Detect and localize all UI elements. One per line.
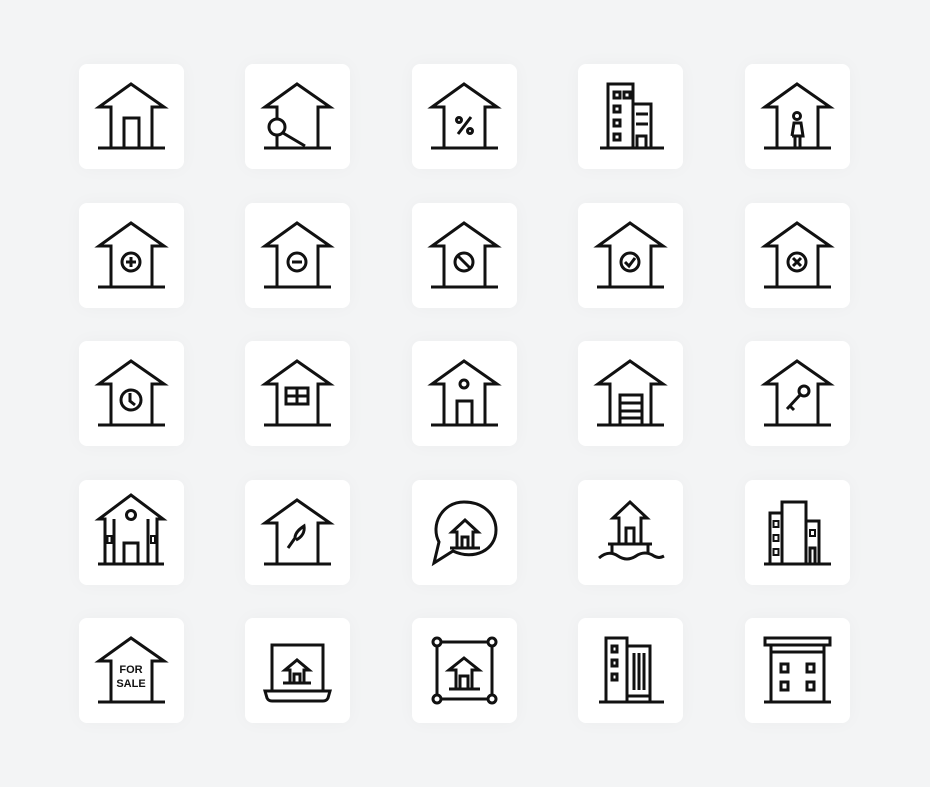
tile: for sale xyxy=(79,618,184,723)
tile: home brush xyxy=(245,480,350,585)
tile: for sale: FOR xyxy=(119,664,143,676)
tile: apartment blocks xyxy=(745,480,850,585)
tile: floor plan xyxy=(412,618,517,723)
tile: home person xyxy=(745,64,850,169)
tile: cottage xyxy=(412,341,517,446)
tile: home percent xyxy=(412,64,517,169)
tile: home search xyxy=(245,64,350,169)
tile: home cancel xyxy=(745,203,850,308)
tile: mansion xyxy=(79,480,184,585)
tile: flat building xyxy=(745,618,850,723)
tile: home check xyxy=(578,203,683,308)
tile: speech bubble home xyxy=(412,480,517,585)
tile: home window xyxy=(245,341,350,446)
tile: tall building xyxy=(578,618,683,723)
tile: home add xyxy=(79,203,184,308)
tile: home blocked xyxy=(412,203,517,308)
tile: home key xyxy=(745,341,850,446)
tile: home remove xyxy=(245,203,350,308)
tile: office building xyxy=(578,64,683,169)
tile: for sale: SALE xyxy=(116,678,146,690)
tile: garage xyxy=(578,341,683,446)
tile: laptop home xyxy=(245,618,350,723)
tile: stilt house xyxy=(578,480,683,585)
tile: home clock xyxy=(79,341,184,446)
tile: home xyxy=(79,64,184,169)
